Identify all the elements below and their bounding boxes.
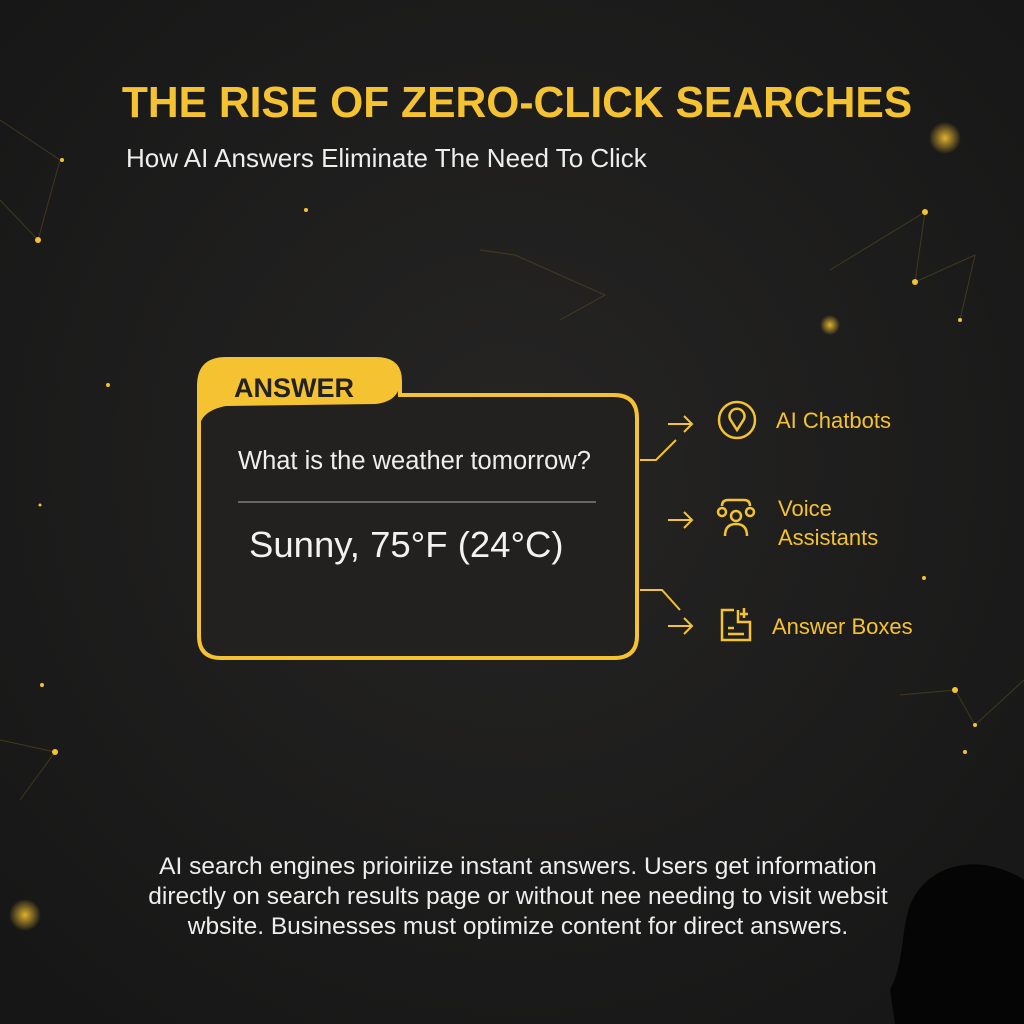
bottom text: wbsite. Businesses must optimize content for direct answers. [188, 913, 848, 940]
item: Answer Boxes [720, 608, 913, 642]
tab label: ANSWER [234, 373, 354, 403]
silhouette [890, 864, 1024, 1024]
icon: people [716, 498, 756, 536]
icon: document [720, 608, 752, 642]
item: Voice Assistants [716, 496, 878, 550]
answer: Sunny, 75°F (24°C) [249, 524, 564, 565]
answer card [197, 357, 639, 660]
subtitle: How AI Answers Eliminate The Need To Click [126, 143, 647, 173]
icon: location pin [718, 400, 756, 440]
item: AI Chatbots: AI Chatbots [776, 408, 891, 433]
item: Voice Assistants: Assistants [778, 525, 878, 550]
item: Answer Boxes: Answer Boxes [772, 614, 913, 639]
item: AI Chatbots [718, 400, 891, 440]
bottom text [148, 853, 888, 940]
item: Voice Assistants: Voice [778, 496, 832, 521]
connectors and arrows [640, 415, 694, 635]
title: THE RISE OF ZERO-CLICK SEARCHES [122, 78, 912, 127]
bottom text: directly on search results page or without nee needing to visit websit [148, 883, 888, 910]
question: What is the weather tomorrow? [238, 447, 591, 475]
bottom text: AI search engines prioiriize instant answers. Users get information [159, 853, 877, 880]
